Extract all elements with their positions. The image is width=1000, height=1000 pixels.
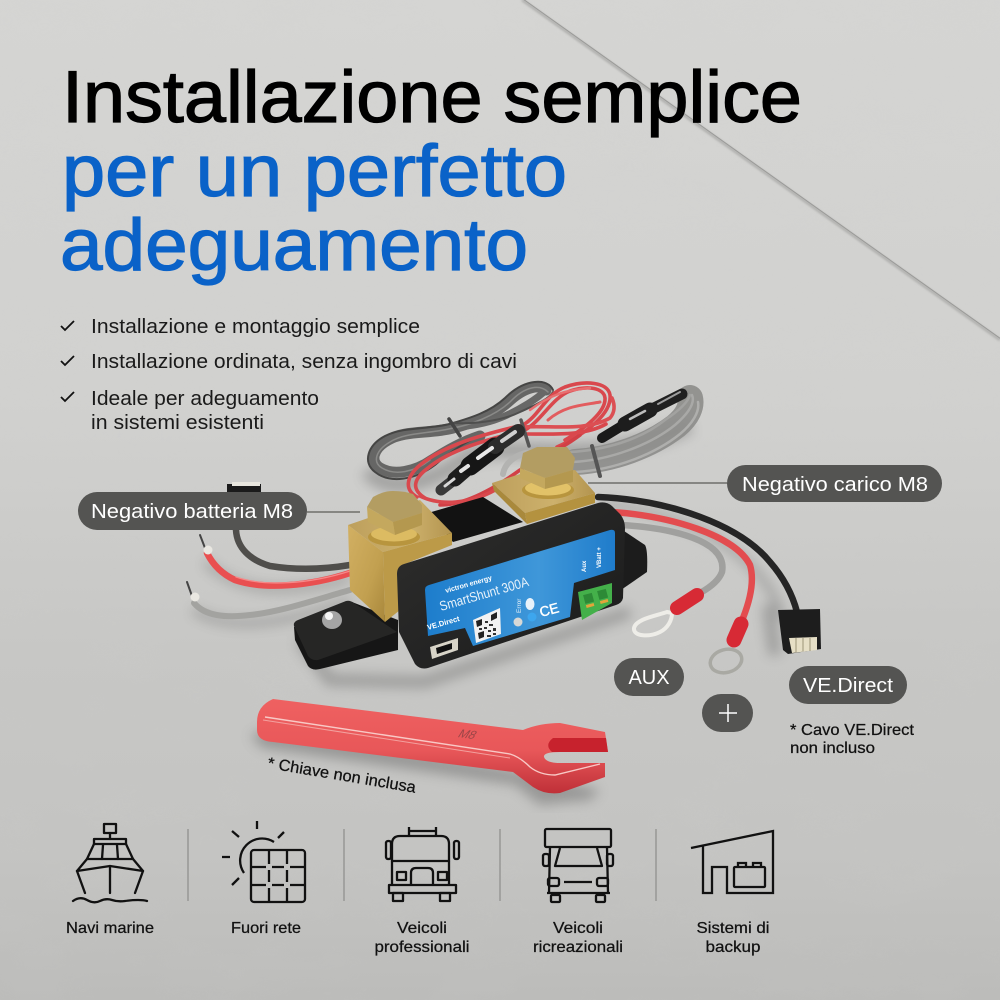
left wires [187, 530, 350, 616]
LEDs and marks [514, 547, 603, 626]
label: AUX: AUX [628, 667, 670, 689]
application labels: Veicoli [397, 920, 447, 937]
port label: VE.Direct [426, 614, 461, 632]
wrench [250, 699, 608, 805]
wrench size mark: M8 [455, 727, 480, 742]
icon: ship [73, 824, 147, 902]
label: Negativo batteria M8 [78, 492, 360, 530]
VE.Direct port [430, 638, 458, 659]
bullet 3 [91, 388, 319, 434]
gray coil back [368, 382, 553, 479]
LEDs and marks: CE [538, 599, 561, 620]
icon: camper [543, 829, 613, 902]
shunt black housing [397, 502, 625, 668]
QR code [473, 608, 501, 643]
fuse holder right [602, 392, 682, 438]
icon: check 3 [61, 392, 74, 401]
application labels: Sistemi di [696, 920, 770, 937]
bullet 1: Installazione e montaggio semplice [91, 316, 420, 338]
label: Negativo carico M8 [588, 465, 942, 502]
icon: check 2 [61, 356, 74, 365]
application labels: Navi marine [66, 920, 154, 937]
label: VE.Direct [789, 666, 907, 704]
bullet 3: Ideale per adeguamento [91, 388, 319, 410]
application labels: backup [706, 939, 761, 956]
label: AUX [614, 658, 684, 696]
note: wrench not included: * Chiave non inclusa [266, 755, 417, 797]
label: plus [702, 694, 753, 732]
icon: check 1 [61, 321, 74, 330]
note: VE.Direct cable not included [790, 722, 915, 757]
bullet 2: Installazione ordinata, senza ingombro di cavi [91, 351, 517, 373]
bullet 3: in sistemi esistenti [91, 412, 264, 434]
dividers [188, 829, 656, 901]
application labels [66, 920, 770, 956]
note: VE.Direct cable not included: non incluso [790, 740, 875, 757]
AUX ring terminal [634, 595, 697, 635]
brand text: victron energy [445, 575, 493, 595]
application labels: Veicoli [553, 920, 603, 937]
left bolt [367, 491, 422, 546]
application labels: ricreazionali [533, 939, 623, 956]
feature checklist [61, 316, 517, 434]
right bolt [520, 447, 575, 499]
product: SmartShunt with cables [187, 382, 821, 682]
application labels: Fuori rete [231, 920, 301, 937]
LEDs and marks: VBatt + [597, 547, 603, 568]
fuse holder left [441, 431, 518, 490]
right wires [598, 497, 797, 618]
title: Installazione semplice [62, 57, 802, 138]
left brass block [348, 500, 452, 622]
left mounting bracket [294, 601, 398, 670]
icon: garage with battery [691, 831, 773, 893]
title [60, 57, 802, 286]
right brass block [492, 470, 595, 524]
LEDs and marks: Error [516, 598, 523, 613]
blue label [425, 530, 615, 646]
application icons [73, 821, 773, 902]
label: Negativo carico M8: Negativo carico M8 [742, 474, 928, 496]
VE.Direct connector [778, 609, 821, 654]
application labels: professionali [374, 939, 470, 956]
icon: professional truck [386, 827, 459, 901]
connector behind left label [227, 482, 261, 496]
note: VE.Direct cable not included: * Cavo VE.Direct [790, 722, 915, 739]
product name: SmartShunt 300A [438, 574, 530, 614]
gray bundle right [503, 395, 698, 476]
cable shadows [193, 425, 782, 682]
black shunt bar [428, 497, 523, 542]
title: per un perfetto [62, 131, 567, 212]
positive ring terminal [708, 624, 744, 676]
title: adeguamento [60, 205, 528, 286]
label: Negativo batteria M8: Negativo batteria M8 [91, 501, 293, 523]
right mounting bracket [618, 527, 647, 592]
screw [322, 611, 342, 629]
red coil [408, 383, 614, 505]
icon: sun and solar panel [222, 821, 305, 902]
green terminal block [578, 583, 612, 620]
LEDs and marks: Aux [582, 560, 588, 572]
label: VE.Direct: VE.Direct [803, 675, 893, 697]
